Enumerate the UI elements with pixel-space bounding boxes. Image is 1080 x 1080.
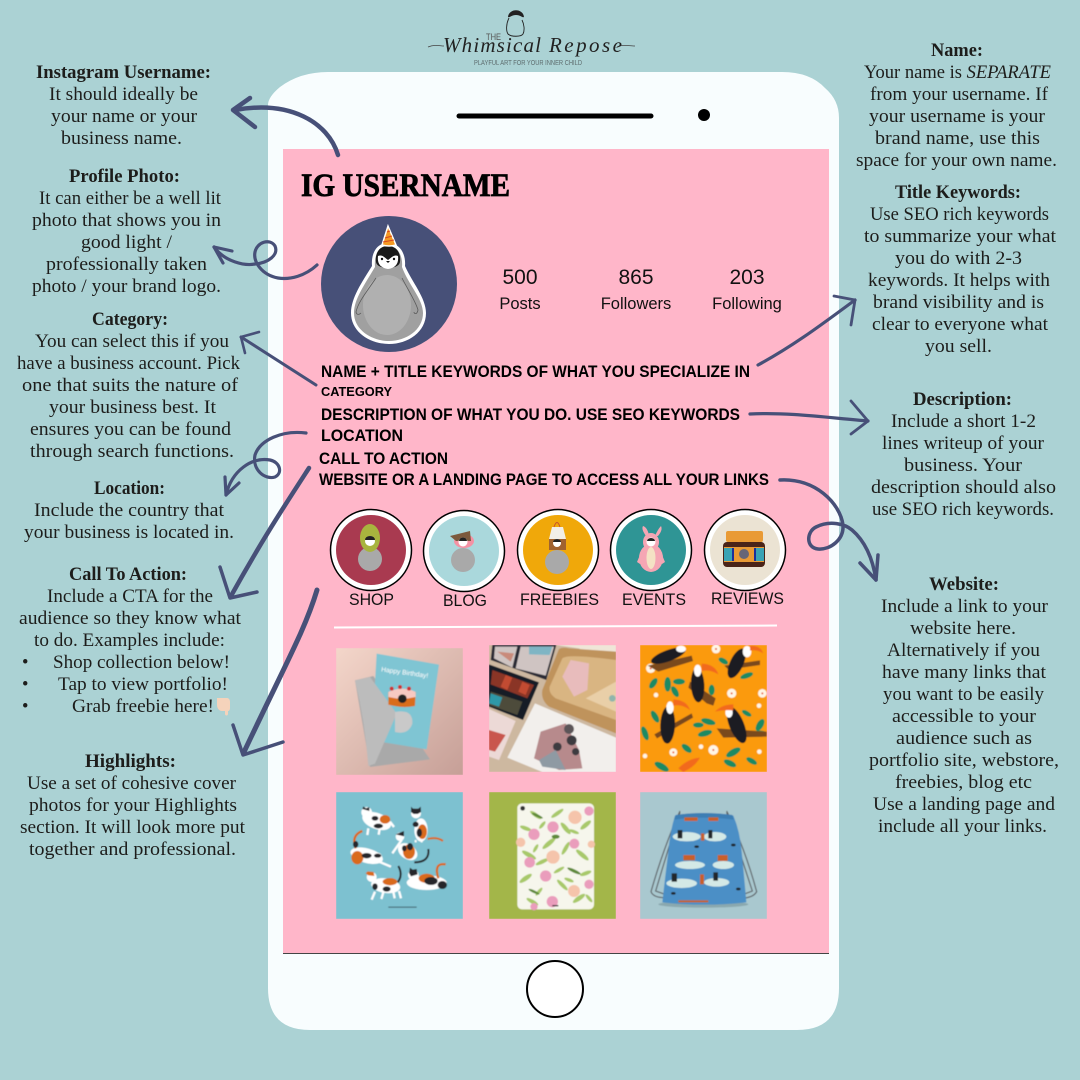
text block: description: use SEO rich keywords.	[872, 500, 1054, 520]
following count: 203	[729, 266, 765, 289]
text block: description: description should also	[871, 478, 1056, 498]
bio text block	[319, 363, 769, 489]
arrow: category	[241, 332, 316, 385]
text block: name: from your username. If	[870, 85, 1049, 105]
text block: name	[856, 41, 1057, 171]
text block: highlights: Use a set of cohesive cover	[27, 774, 236, 794]
cat: stretching	[349, 831, 391, 867]
highlight: freebies	[518, 510, 598, 590]
post: penguin drawstring bag	[640, 792, 767, 919]
highlight: blog	[424, 510, 504, 592]
icon: pointing hand	[217, 698, 230, 716]
bio text block: DESCRIPTION OF WHAT YOU DO. USE SEO KEYWORDS	[321, 406, 740, 424]
bio text block: NAME + TITLE KEYWORDS OF WHAT YOU SPECIALIZE IN	[321, 363, 750, 381]
bio text block: CATEGORY	[321, 384, 392, 399]
phone mockup	[268, 72, 839, 1030]
cat: sitting	[407, 864, 447, 890]
text block: call to action: Shop collection below!	[53, 653, 230, 673]
text block: Instagram username: business name.	[61, 129, 182, 149]
text block: name: brand name, use this	[875, 129, 1040, 149]
text block: call to action: Include a CTA for the	[47, 587, 213, 607]
cat: top right	[411, 807, 443, 842]
posts count: 500	[502, 266, 538, 289]
arrow: username	[233, 98, 338, 155]
text block: call to action: Grab freebie here!	[72, 697, 214, 717]
text block: category: have a business account. Pick	[17, 354, 241, 374]
text block: website: Alternatively if you	[887, 641, 1040, 661]
text block: call to action: audience so they know what	[19, 609, 242, 629]
profile photo: penguin with party hat	[321, 216, 457, 352]
highlight labels: SHOP	[349, 591, 394, 609]
photo grid	[336, 644, 767, 919]
text block: call to action: •	[22, 675, 28, 695]
text block: website	[869, 575, 1059, 837]
text block: call to action: Tap to view portfolio!	[58, 675, 228, 695]
followers count: Followers	[601, 295, 671, 313]
text block: location	[24, 479, 234, 543]
text block: profile photo: It can either be a well lit	[39, 189, 222, 209]
heading: IG username: IG USERNAME	[301, 168, 510, 204]
text block: name: Your name is SEPARATE	[864, 63, 1051, 83]
text block: category: one that suits the nature of	[22, 376, 239, 396]
arrow: call to action	[220, 468, 309, 598]
arrow: profile photo	[214, 242, 317, 278]
highlight: reviews	[704, 510, 786, 590]
text block: call to action: to do. Examples include:	[34, 631, 225, 651]
text block: profile photo: good light /	[81, 233, 173, 253]
bio text block: WEBSITE OR A LANDING PAGE TO ACCESS ALL YOUR LINKS	[319, 471, 769, 489]
text block: website: audience such as	[896, 729, 1032, 749]
arrow: highlights	[233, 590, 317, 755]
logo: The Whimsical Repose: Whimsical	[443, 33, 541, 57]
post: toucan pattern	[640, 645, 767, 772]
text block: Instagram username: It should ideally be	[49, 85, 198, 105]
text block: profile photo	[32, 167, 222, 297]
text block: name: your username is your	[869, 107, 1045, 127]
arrow: location	[225, 432, 306, 495]
stats row	[499, 266, 782, 313]
post: birthday card	[336, 648, 463, 775]
text block: description: lines writeup of your	[882, 434, 1044, 454]
text block: call to action	[19, 565, 242, 717]
text block: website: you want to be easily	[883, 685, 1045, 705]
following count	[712, 266, 782, 313]
text block: title keywords: to summarize your what	[864, 227, 1057, 247]
text block: website: Website:	[929, 575, 999, 595]
text block: website: freebies, blog etc	[895, 773, 1032, 793]
text block: name: space for your own name.	[856, 151, 1057, 171]
text block: title keywords	[864, 183, 1057, 357]
text block: name: Name:	[931, 41, 983, 61]
text block: profile photo: professionally taken	[46, 255, 207, 275]
bio text block: LOCATION	[321, 427, 403, 445]
highlight labels	[349, 590, 784, 610]
highlight labels: BLOG	[443, 592, 487, 610]
text block: location: Location:	[94, 479, 165, 499]
text block: description: Description:	[913, 390, 1012, 410]
following count: Following	[712, 295, 782, 313]
text block: Instagram username	[36, 63, 211, 149]
phone screen	[283, 149, 829, 954]
text block: category: your business best. It	[49, 398, 217, 418]
text block: category: ensures you can be found	[30, 420, 232, 440]
text block: title keywords: you sell.	[925, 337, 992, 357]
text block: title keywords: Use SEO rich keywords	[870, 205, 1049, 225]
text block: location: your business is located in.	[24, 523, 234, 543]
text block: highlights	[20, 752, 246, 860]
text block: category: through search functions.	[30, 442, 234, 462]
text block: website: Use a landing page and	[873, 795, 1056, 815]
text block: profile photo: photo that shows you in	[32, 211, 221, 231]
text block: website: portfolio site, webstore,	[869, 751, 1059, 771]
arrow: title keywords	[758, 296, 855, 365]
posts count: Posts	[499, 295, 541, 313]
arrow: website	[780, 480, 878, 580]
logo: The Whimsical Repose	[428, 10, 635, 67]
text block: title keywords: clear to everyone what	[872, 315, 1049, 335]
highlights row	[330, 510, 786, 592]
posts count	[499, 266, 541, 313]
highlight labels: EVENTS	[622, 591, 686, 609]
logo: The Whimsical Repose: PLAYFUL ART FOR YOUR INNER CHILD	[474, 60, 582, 67]
logo: The Whimsical Repose: THE	[486, 32, 501, 42]
text block: highlights: Highlights:	[85, 752, 176, 772]
phone body	[268, 72, 839, 1030]
text block: description	[871, 390, 1056, 520]
highlight: shop	[330, 510, 412, 590]
text block: category	[17, 310, 241, 462]
bio text block: CALL TO ACTION	[319, 450, 448, 468]
text block: highlights: section. It will look more put	[20, 818, 246, 838]
text block: website: include all your links.	[878, 817, 1047, 837]
text block: title keywords: Title Keywords:	[895, 183, 1021, 203]
text block: Instagram username: Instagram Username:	[36, 63, 211, 83]
text block: location: Include the country that	[34, 501, 225, 521]
post: birthday card: Happy Birthday!	[381, 666, 429, 680]
text block: description: Include a short 1-2	[891, 412, 1036, 432]
text block: category: Category:	[92, 310, 168, 330]
highlight: events	[610, 510, 692, 590]
text block: call to action: Call To Action:	[69, 565, 187, 585]
text block: profile photo: photo / your brand logo.	[32, 277, 221, 297]
phone camera	[698, 109, 710, 121]
followers count	[601, 266, 671, 313]
text block: title keywords: keywords. It helps with	[868, 271, 1050, 291]
text block: website: accessible to your	[892, 707, 1036, 727]
text block: title keywords: you do with 2-3	[895, 249, 1022, 269]
highlight labels: FREEBIES	[520, 591, 599, 609]
screen bottom edge	[283, 952, 829, 954]
text block: category: You can select this if you	[35, 332, 229, 352]
followers count: 865	[618, 266, 654, 289]
text block: website: have many links that	[882, 663, 1047, 683]
post: floral tablet case	[489, 792, 616, 919]
text block: profile photo: Profile Photo:	[69, 167, 180, 187]
cat: top left	[360, 806, 394, 835]
text block: highlights: photos for your Highlights	[29, 796, 237, 816]
post: calico cats	[336, 792, 463, 919]
text block: Instagram username: your name or your	[51, 107, 197, 127]
text block: website: Include a link to your	[881, 597, 1048, 617]
phone home button	[527, 961, 583, 1017]
cat: walking	[366, 866, 401, 900]
arrow: description	[750, 401, 868, 434]
text block: call to action: •	[22, 653, 28, 673]
text block: website: website here.	[910, 619, 1016, 639]
text block: call to action: •	[22, 697, 28, 717]
text block: description: business. Your	[904, 456, 1022, 476]
logo: The Whimsical Repose: Repose	[548, 33, 622, 57]
cat: middle	[392, 831, 428, 864]
phone speaker	[459, 114, 651, 118]
text block: highlights: together and professional.	[29, 840, 236, 860]
post: watercolour palette and painting	[489, 645, 616, 772]
text block: title keywords: brand visibility and is	[873, 293, 1044, 313]
highlight labels: REVIEWS	[711, 590, 784, 608]
